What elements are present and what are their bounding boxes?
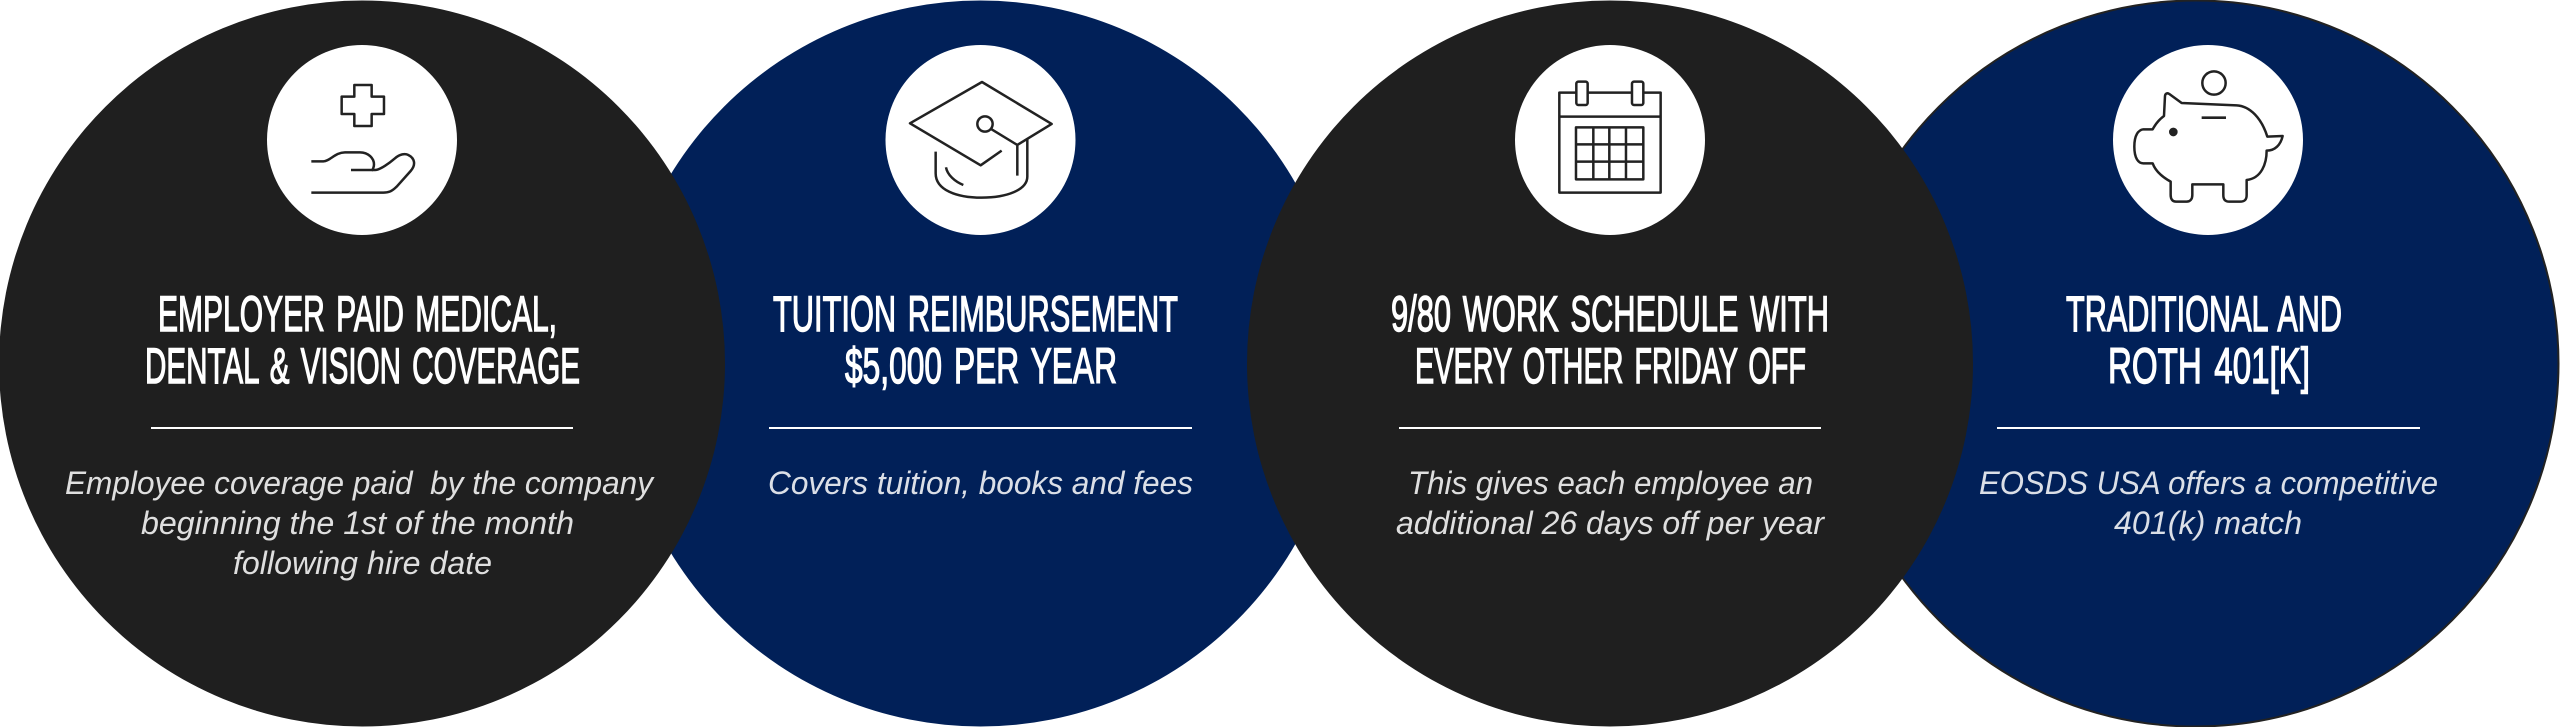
heading: medical coverage: DENTAL & VISION COVERAGE [145, 338, 580, 394]
divider [1997, 427, 2420, 429]
body text: 401k: EOSDS USA offers a competitive [1979, 465, 2438, 501]
body text: medical coverage: beginning the 1st of the month [141, 505, 574, 541]
heading: work schedule: 9/80 WORK SCHEDULE WITH [1391, 286, 1829, 342]
body text: medical coverage: Employee coverage paid by the company [65, 465, 655, 501]
heading: 401k: TRADITIONAL AND [2066, 286, 2342, 342]
body text: work schedule: additional 26 days off per year [1396, 505, 1825, 541]
body text: 401k [1979, 465, 2438, 541]
circle background: black [0, 0, 725, 726]
circle background: navy with dark outline [1832, 0, 2558, 726]
panel: 9/80 work schedule [1247, 0, 1973, 726]
heading: work schedule [1391, 286, 1829, 394]
divider [1399, 427, 1821, 429]
body text: medical coverage: following hire date [233, 545, 492, 581]
icon: hand with medical cross [267, 45, 457, 235]
divider [769, 427, 1192, 429]
icon: graduation cap [886, 45, 1076, 235]
body text: work schedule: This gives each employee an [1408, 465, 1813, 501]
body text: medical coverage [65, 465, 655, 581]
heading: 401k [2066, 286, 2342, 394]
heading: medical coverage [145, 286, 580, 394]
heading: work schedule: EVERY OTHER FRIDAY OFF [1415, 338, 1806, 394]
panel: 401k [1832, 0, 2558, 726]
body text: tuition: Covers tuition, books and fees [768, 465, 1193, 501]
heading: tuition reimbursement: TUITION REIMBURSEMENT [773, 286, 1178, 342]
body text: 401k: 401(k) match [2114, 505, 2302, 541]
icon: piggy bank [2113, 45, 2303, 235]
circle background: black [1247, 0, 1973, 726]
icon: calendar [1515, 45, 1705, 235]
divider [151, 427, 573, 429]
heading: tuition reimbursement [773, 286, 1178, 394]
circle background: navy [618, 0, 1344, 726]
heading: tuition reimbursement: $5,000 PER YEAR [845, 338, 1117, 394]
heading: 401k: ROTH 401[K] [2108, 338, 2310, 394]
panel: tuition reimbursement [618, 0, 1344, 726]
heading: medical coverage: EMPLOYER PAID MEDICAL, [158, 286, 557, 342]
body text: work schedule [1396, 465, 1825, 541]
panel: medical coverage [0, 0, 725, 726]
